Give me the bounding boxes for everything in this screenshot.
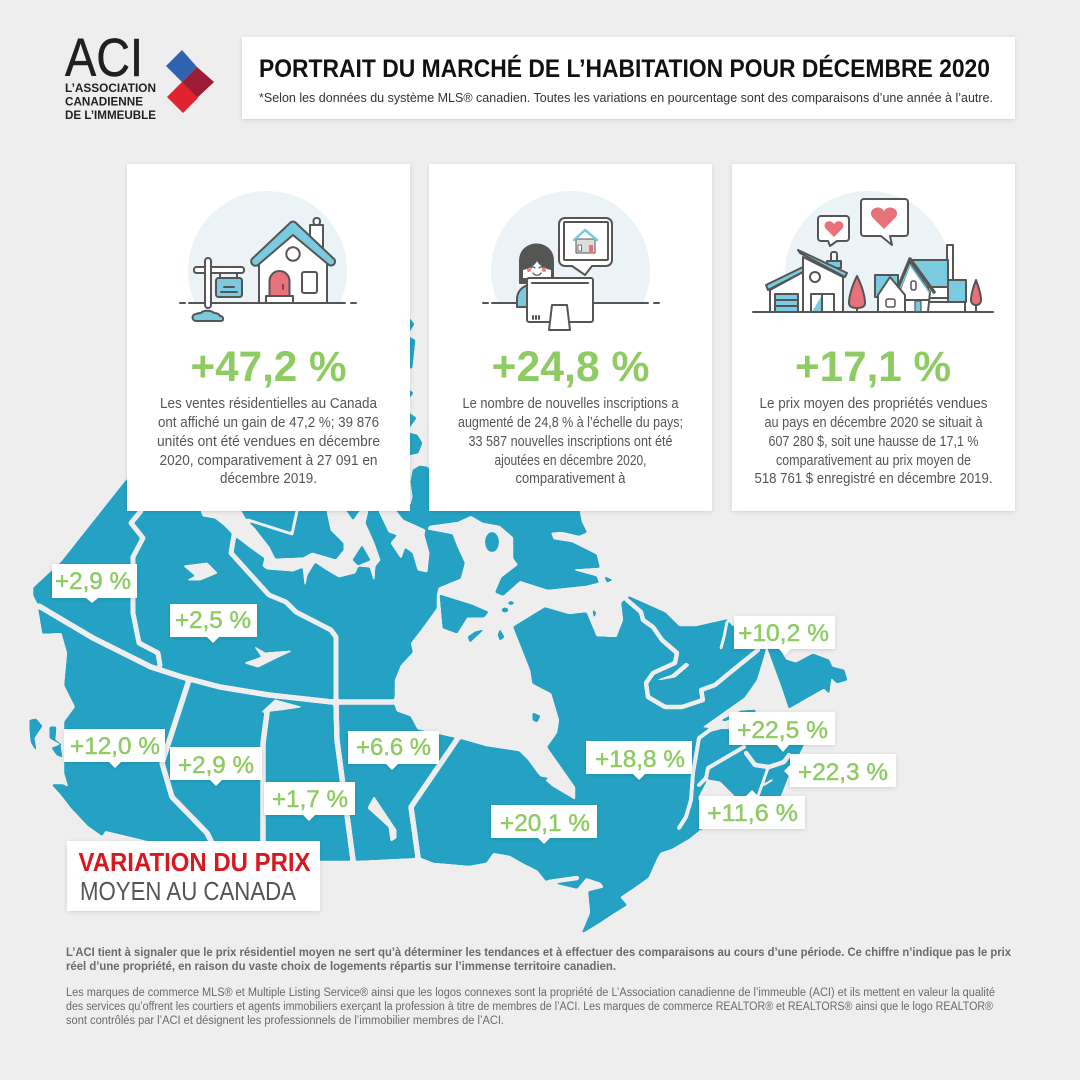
title panel: PORTRAIT DU MARCHÉ DE L’HABITATION POUR DÉCEMBRE 2020 <box>259 54 990 83</box>
description: Le prix moyen des propriétés vendues <box>760 396 988 412</box>
callout: Nova Scotia <box>784 754 896 787</box>
callout: Ontario <box>491 805 597 844</box>
map of Canada <box>25 310 855 940</box>
callout: Manitoba <box>348 731 439 770</box>
description: comparativement au prix moyen de <box>776 453 971 469</box>
bold disclaimer <box>66 947 1012 973</box>
trademark note: des services qu’offrent les courtiers et agents immobiliers exerçant la profession à titre de membres de l’ACI. Les marques de commerce REALTOR® et REALTORS® ainsi que le logo REALTOR® <box>66 1001 993 1013</box>
callout: Newfoundland <box>734 616 835 655</box>
panel: sales <box>127 164 410 511</box>
callout: Quebec: +18,8 % <box>595 746 685 773</box>
callout: New Brunswick <box>699 790 805 829</box>
big number: +47,2 % <box>190 343 346 391</box>
description <box>157 396 380 487</box>
callout: Nova Scotia: +22,3 % <box>798 759 888 786</box>
description: augmenté de 24,8 % à l’échelle du pays; <box>458 415 683 431</box>
callout: Prince Edward Island <box>729 712 835 752</box>
panel: new listings <box>429 164 712 511</box>
trademark note <box>66 987 995 1027</box>
map title: MOYEN AU CANADA <box>80 876 297 906</box>
callout: Alberta <box>170 747 262 786</box>
description: Le nombre de nouvelles inscriptions a <box>462 396 679 412</box>
description: décembre 2019. <box>220 471 317 487</box>
description: ont affiché un gain de 47,2 %; 39 876 <box>158 415 379 431</box>
description: 2020, comparativement à 27 091 en <box>160 453 378 469</box>
logo: ACI: CANADIENNE <box>65 96 143 108</box>
callout: Saskatchewan: +1,7 % <box>272 786 348 813</box>
callout: Northwest Territories <box>170 604 257 643</box>
trademark note: Les marques de commerce MLS® et Multiple Listing Service® ainsi que les logos connexes sont la propriété de L’Association canadienne de l’immeuble (ACI) et ils mettent en valeur la qualité <box>66 987 995 999</box>
callout: Yukon: +2,9 % <box>55 568 131 595</box>
icon: person at computer <box>482 191 660 331</box>
description: unités ont été vendues en décembre <box>157 434 380 450</box>
callout: Prince Edward Island: +22,5 % <box>737 717 828 744</box>
map title: VARIATION DU PRIX <box>78 847 311 877</box>
callout: Yukon <box>52 564 137 603</box>
callout: Alberta: +2,9 % <box>178 752 254 779</box>
callout: Northwest Territories: +2,5 % <box>175 607 251 634</box>
logo: ACI: ACI <box>65 28 143 88</box>
description: ajoutées en décembre 2020, <box>494 453 646 469</box>
panel: average price <box>732 164 1015 511</box>
description: 607 280 $, soit une hausse de 17,1 % <box>768 434 979 450</box>
description: 518 761 $ enregistré en décembre 2019. <box>754 471 992 487</box>
callout: British Columbia: +12,0 % <box>70 733 160 760</box>
callout: Saskatchewan <box>264 782 355 821</box>
logo: ACI <box>65 28 214 122</box>
trademark note: sont contrôlés par l’ACI et désignent les professionnels de l’immobilier membres de l’ACI. <box>66 1015 504 1027</box>
logo: ACI: DE L’IMMEUBLE <box>65 110 156 122</box>
description: Les ventes résidentielles au Canada <box>160 396 378 412</box>
description: au pays en décembre 2020 se situait à <box>764 415 983 431</box>
big number: +17,1 % <box>795 343 951 391</box>
callout: British Columbia <box>64 729 165 768</box>
logo: ACI: L’ASSOCIATION <box>65 83 156 95</box>
big number: +24,8 % <box>492 343 650 391</box>
description <box>754 396 992 487</box>
map title <box>67 841 320 911</box>
description: comparativement à <box>516 471 626 487</box>
title panel <box>242 37 1015 119</box>
callout: Ontario: +20,1 % <box>500 810 590 837</box>
bold disclaimer: réel d’une propriété, en raison du vaste choix de logements répartis sur l’immense territoire canadien. <box>66 961 616 973</box>
callout: Newfoundland: +10,2 % <box>738 620 829 647</box>
icon: houses with hearts <box>752 191 994 313</box>
callout: New Brunswick: +11,6 % <box>707 800 798 827</box>
callout: Quebec <box>586 741 692 780</box>
title panel: *Selon les données du système MLS® canadien. Toutes les variations en pourcentage sont des comparaisons d’une année à l’autre. <box>259 90 993 105</box>
description: 33 587 nouvelles inscriptions ont été <box>468 434 672 450</box>
description <box>458 396 683 487</box>
bold disclaimer: L’ACI tient à signaler que le prix résidentiel moyen ne sert qu’à déterminer les tendances et à effectuer des comparaisons au cours d’une période. Ce chiffre n’indique pas le prix <box>66 947 1012 959</box>
callout: Manitoba: +6.6 % <box>356 734 431 761</box>
icon: house with sign <box>179 191 357 322</box>
